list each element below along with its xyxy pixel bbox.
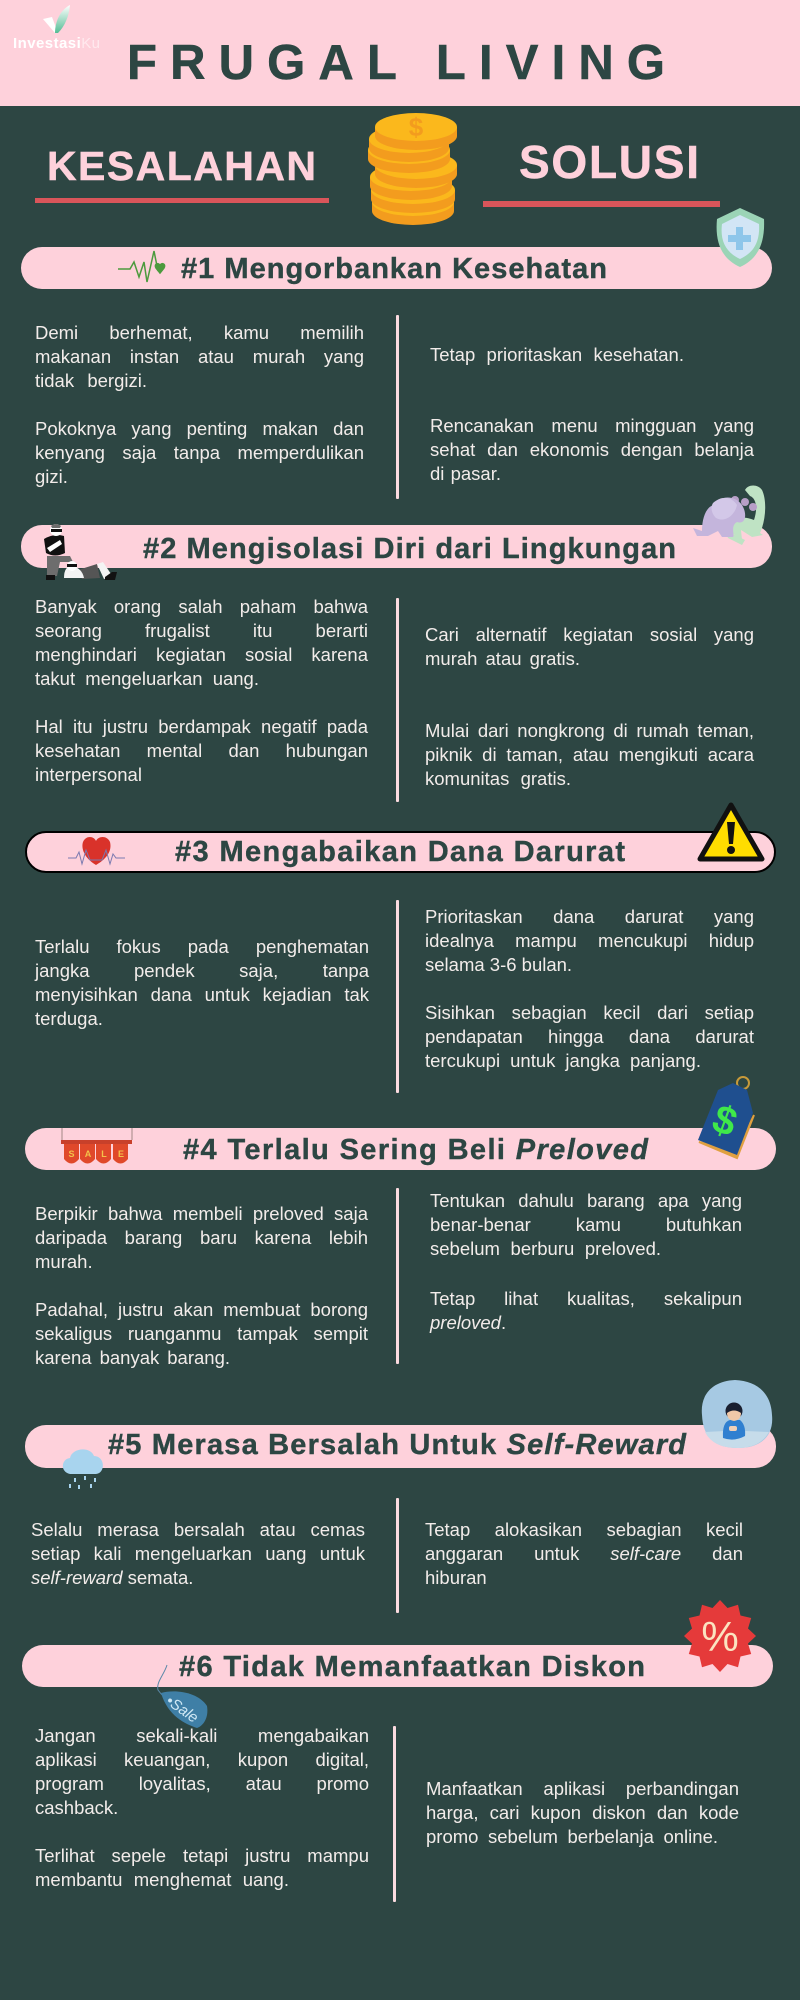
icon: sale awning: A <box>85 1149 92 1159</box>
text: #4 solusi: sebelum berburu preloved. <box>430 1238 661 1259</box>
text: #1 solusi: sehat dan ekonomis dengan belanja <box>430 439 754 460</box>
text: #1 solusi: Tetap prioritaskan kesehatan. <box>430 344 684 365</box>
icon: rain cloud <box>63 1449 103 1489</box>
header band <box>0 0 800 106</box>
icon: dinosaurs <box>693 486 765 545</box>
banner: #2 <box>21 525 772 568</box>
text: #2 kesalahan: takut mengeluarkan uang. <box>35 668 259 689</box>
icon: sale awning: E <box>118 1149 124 1159</box>
banner: #3 <box>26 832 775 872</box>
text: #6 solusi: promo sebelum berbelanja online. <box>426 1826 718 1847</box>
text: #2 solusi: murah atau gratis. <box>425 648 580 669</box>
divider #5 <box>396 1498 399 1613</box>
text: #2 kesalahan: kesehatan mental dan hubungan <box>35 740 368 761</box>
text: #4 solusi: preloved. <box>430 1312 506 1333</box>
divider #3 <box>396 900 399 1093</box>
text: #2 kesalahan: interpersonal <box>35 764 142 785</box>
icon: shield <box>717 208 764 267</box>
text: #3 kesalahan: menyisihkan dana untuk kejadian tak <box>35 984 369 1005</box>
text: #4 kesalahan: sekaligus ruanganmu tampak sempit <box>35 1323 368 1344</box>
text: #6 kesalahan: aplikasi keuangan, kupon digital, <box>35 1749 369 1770</box>
banner: #6: #6 Tidak Memanfaatkan Diskon <box>179 1651 645 1683</box>
text: #1 solusi <box>430 344 754 484</box>
text: #2 kesalahan <box>35 596 368 785</box>
text: #2 solusi <box>425 624 754 789</box>
icon: price tag <box>698 1077 754 1158</box>
text: #1 kesalahan: tidak bergizi. <box>35 370 147 391</box>
text: #5 kesalahan: self-reward semata. <box>31 1567 193 1588</box>
text: #5 solusi: hiburan <box>425 1567 487 1588</box>
icon: warning triangle <box>700 805 762 859</box>
text: #4 kesalahan: karena banyak barang. <box>35 1347 230 1368</box>
icon: heartbeat <box>118 251 165 282</box>
icon: discount badge: % <box>701 1613 739 1660</box>
icon: sale tag: •Sale <box>163 1692 201 1727</box>
text: #4 solusi: Tetap lihat kualitas, sekalipun <box>430 1288 742 1309</box>
icon: sale awning: S <box>68 1149 75 1159</box>
text: #6 kesalahan: cashback. <box>35 1797 118 1818</box>
banner: #1: #1 Mengorbankan Kesehatan <box>181 253 607 285</box>
icon: sad person <box>702 1380 772 1448</box>
divider #1 <box>396 315 399 499</box>
text: #5 solusi: anggaran untuk self-care dan <box>425 1543 743 1564</box>
text: #2 kesalahan: Hal itu justru berdampak negatif pada <box>35 716 368 737</box>
icon: sale awning: L <box>101 1149 107 1159</box>
text: #1 solusi: di pasar. <box>430 463 501 484</box>
text: #3 solusi: Sisihkan sebagian kecil dari setiap <box>425 1002 754 1023</box>
icon: sale awning <box>61 1128 132 1164</box>
text: #1 kesalahan: Demi berhemat, kamu memilih <box>35 322 364 343</box>
banner: #4 <box>25 1128 776 1170</box>
heading: kesalahan: KESALAHAN <box>47 143 316 189</box>
text: #5 kesalahan <box>31 1519 365 1588</box>
icon: heart with pulse <box>68 837 125 865</box>
text: #6 kesalahan: Terlihat sepele tetapi justru mampu <box>35 1845 369 1866</box>
text: #1 kesalahan: makanan instan atau murah yang <box>35 346 364 367</box>
text: #5 solusi <box>425 1519 743 1588</box>
text: #4 solusi: benar-benar kamu butuhkan <box>430 1214 742 1235</box>
banner: #5 <box>25 1425 776 1468</box>
icon: coin stack: $ <box>409 112 424 142</box>
logo: InvestasiKu: InvestasiKu <box>13 35 100 52</box>
banner: #5: #5 Merasa Bersalah Untuk Self-Reward <box>108 1429 687 1461</box>
text: #6 solusi: harga, cari kupon diskon dan kode <box>426 1802 739 1823</box>
divider #6 <box>393 1726 396 1902</box>
icon: price tag: $ <box>707 1096 743 1145</box>
text: #3 kesalahan <box>34 936 370 1029</box>
text: #3 solusi <box>425 906 754 1071</box>
icon: coin stack <box>368 112 457 225</box>
text: #6 solusi <box>426 1778 739 1847</box>
text: #3 solusi: tercukupi untuk jangka panjang. <box>425 1050 701 1071</box>
banner: #3: #3 Mengabaikan Dana Darurat <box>175 836 625 868</box>
text: #1 solusi: Rencanakan menu mingguan yang <box>430 415 754 436</box>
title: FRUGAL LIVING <box>127 36 665 90</box>
divider #4 <box>396 1188 399 1364</box>
text: #6 kesalahan: Jangan sekali-kali mengabaikan <box>35 1725 369 1746</box>
text: #2 kesalahan: menghindari kegiatan sosial karena <box>35 644 368 665</box>
banner: #2: #2 Mengisolasi Diri dari Lingkungan <box>143 533 676 565</box>
text: #5 kesalahan: Selalu merasa bersalah atau cemas <box>31 1519 365 1540</box>
banner: #4: #4 Terlalu Sering Beli Preloved <box>183 1134 649 1166</box>
text: #1 kesalahan <box>35 322 364 487</box>
text: #1 kesalahan: gizi. <box>35 466 68 487</box>
text: #2 solusi: piknik di taman, atau mengikuti acara <box>425 744 754 765</box>
text: #5 solusi: Tetap alokasikan sebagian kecil <box>425 1519 743 1540</box>
text: #5 kesalahan: setiap kali mengeluarkan uang untuk <box>31 1543 365 1564</box>
text: #6 solusi: Manfaatkan aplikasi perbandingan <box>426 1778 739 1799</box>
icon: sale tag <box>158 1665 207 1728</box>
text: #3 solusi: idealnya mampu mencukupi hidup <box>425 930 754 951</box>
text: #3 kesalahan: Terlalu fokus pada penghematan <box>35 936 369 957</box>
text: #4 kesalahan: Padahal, justru akan membuat borong <box>35 1299 368 1320</box>
text: #2 solusi: Cari alternatif kegiatan sosial yang <box>425 624 754 645</box>
banner: #1 <box>21 247 772 289</box>
logo: InvestasiKu <box>13 5 100 52</box>
text: #2 kesalahan: seorang frugalist itu berarti <box>35 620 368 641</box>
text: #6 kesalahan: program loyalitas, atau promo <box>35 1773 369 1794</box>
divider #2 <box>396 598 399 802</box>
text: #3 solusi: selama 3-6 bulan. <box>425 954 572 975</box>
text: #4 solusi <box>430 1190 742 1333</box>
text: #3 kesalahan: jangka pendek saja, tanpa <box>35 960 369 981</box>
text: #2 kesalahan: Banyak orang salah paham bahwa <box>35 596 368 617</box>
heading: solusi: SOLUSI <box>519 136 699 188</box>
text: #3 solusi: pendapatan hingga dana darurat <box>425 1026 754 1047</box>
text: #3 solusi: Prioritaskan dana darurat yang <box>425 906 754 927</box>
text: #2 solusi: komunitas gratis. <box>425 768 571 789</box>
text: #4 solusi: Tentukan dahulu barang apa yang <box>430 1190 742 1211</box>
text: #4 kesalahan <box>35 1203 368 1368</box>
text: #4 kesalahan: Berpikir bahwa membeli preloved saja <box>35 1203 368 1224</box>
text: #4 kesalahan: daripada barang baru karena lebih <box>35 1227 368 1248</box>
icon: discount badge <box>684 1600 756 1672</box>
text: #6 kesalahan: membantu menghemat uang. <box>35 1869 289 1890</box>
text: #1 kesalahan: kenyang saja tanpa memperdulikan <box>35 442 364 463</box>
text: #1 kesalahan: Pokoknya yang penting makan dan <box>35 418 364 439</box>
text: #3 kesalahan: terduga. <box>35 1008 103 1029</box>
text: #2 solusi: Mulai dari nongkrong di rumah teman, <box>425 720 754 741</box>
text: #6 kesalahan <box>35 1725 369 1890</box>
banner: #6 <box>22 1645 773 1687</box>
icon: two people <box>44 524 117 580</box>
text: #4 kesalahan: murah. <box>35 1251 93 1272</box>
heading: solusi <box>483 136 720 207</box>
